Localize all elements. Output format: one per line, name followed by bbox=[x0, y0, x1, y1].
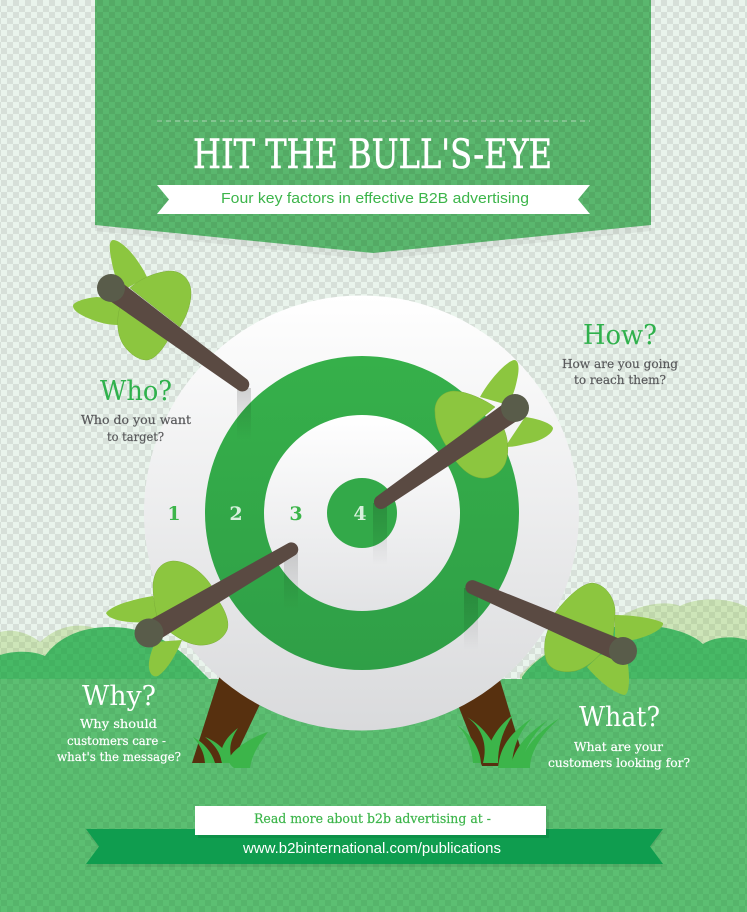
label: why: customers care - bbox=[67, 733, 166, 748]
title: HIT THE BULL'S-EYE bbox=[193, 132, 552, 178]
target bbox=[144, 296, 579, 730]
footer call to action bbox=[195, 806, 549, 838]
footer ribbon bbox=[86, 829, 663, 867]
label: how: How are you going bbox=[562, 356, 678, 371]
dart: who bbox=[73, 240, 249, 391]
dart: how bbox=[374, 360, 553, 509]
grass: left bbox=[193, 728, 268, 768]
target stand: right leg bbox=[458, 680, 526, 766]
label: how: How? bbox=[583, 319, 657, 351]
label: what: What are your bbox=[574, 739, 663, 754]
label: what: What? bbox=[579, 701, 660, 733]
footer call to action: Read more about b2b advertising at - bbox=[254, 812, 491, 827]
back hills bbox=[0, 599, 747, 680]
score numbers bbox=[167, 503, 367, 525]
label: why bbox=[57, 680, 181, 764]
dart shadows bbox=[237, 388, 478, 650]
score numbers: 3 bbox=[289, 503, 303, 525]
label: who bbox=[81, 375, 191, 444]
header banner bbox=[95, 0, 651, 260]
label: who: Who do you want bbox=[81, 412, 191, 427]
subtitle ribbon bbox=[157, 185, 590, 214]
score numbers: 1 bbox=[167, 503, 181, 525]
score numbers: 4 bbox=[353, 503, 367, 525]
target stand: left leg bbox=[192, 675, 262, 763]
ground bbox=[0, 679, 747, 912]
dashed rule bbox=[157, 120, 590, 122]
label: why: Why should bbox=[80, 716, 157, 731]
label: how: to reach them? bbox=[574, 372, 666, 387]
label: what bbox=[548, 701, 690, 770]
grass: right bbox=[457, 715, 560, 768]
label: how bbox=[562, 319, 678, 387]
dart: why bbox=[106, 542, 298, 676]
label: why: what's the message? bbox=[57, 749, 181, 764]
label: who: to target? bbox=[107, 429, 164, 444]
label: what: customers looking for? bbox=[548, 755, 690, 770]
score numbers: 2 bbox=[229, 503, 243, 525]
footer ribbon: www.b2binternational.com/publications bbox=[242, 841, 501, 857]
label: why: Why? bbox=[82, 680, 156, 712]
label: who: Who? bbox=[100, 375, 172, 407]
front hills bbox=[0, 625, 747, 680]
subtitle ribbon: Four key factors in effective B2B advertising bbox=[221, 190, 529, 207]
dart: what bbox=[465, 580, 663, 695]
